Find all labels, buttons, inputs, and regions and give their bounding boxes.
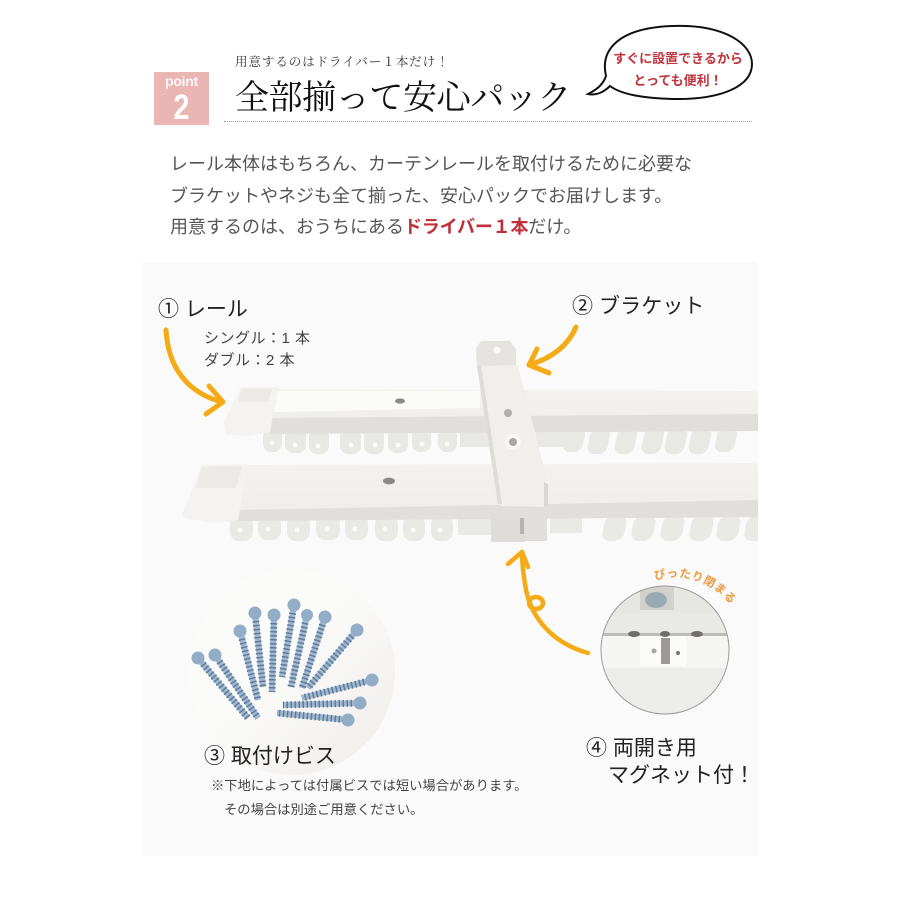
panel: product background xyxy=(142,262,758,856)
label: rail quantities xyxy=(204,330,311,368)
runner hooks xyxy=(263,431,737,454)
arrow: bracket xyxy=(529,327,576,373)
badge: point 2 xyxy=(154,72,209,125)
end cap xyxy=(182,464,248,523)
label: rail quantities: シングル：1 本 xyxy=(204,330,311,347)
badge: point 2: point xyxy=(165,73,198,89)
label: screws: ③ 取付けビス xyxy=(204,745,336,768)
end cap xyxy=(224,387,278,436)
badge: point 2: 2 xyxy=(174,88,189,127)
label: magnet xyxy=(586,737,755,787)
dotted divider xyxy=(224,121,752,122)
arrow: magnet xyxy=(508,552,588,653)
label: rail quantities: ダブル：2 本 xyxy=(204,352,295,368)
mounting hole xyxy=(395,398,405,404)
subheading: 用意するのはドライバー１本だけ！ xyxy=(235,55,450,69)
curved label: ぴったり閉まる: ぴったり閉まる xyxy=(654,568,736,602)
screw note: その場合は別途ご用意ください。 xyxy=(224,802,423,817)
rail body xyxy=(240,463,758,510)
rail body xyxy=(272,389,758,418)
title: 全部揃って安心パック xyxy=(235,80,571,117)
product illustration xyxy=(164,324,758,775)
bracket screws xyxy=(504,409,512,417)
magnet joint xyxy=(491,518,525,542)
intro text block xyxy=(170,154,692,237)
label: magnet: マグネット付！ xyxy=(608,764,755,787)
screw note: ※下地によっては付属ビスでは短い場合があります。 xyxy=(211,778,527,793)
screw note xyxy=(211,778,527,817)
label: magnet: ④ 両開き用 xyxy=(586,737,697,760)
top rail xyxy=(224,387,758,454)
screw photo circle xyxy=(189,569,395,775)
intro text block: ブラケットやネジも全て揃った、安心パックでお届けします。 xyxy=(170,186,672,206)
speech bubble callout: すぐに設置できるから xyxy=(613,51,743,66)
speech bubble callout: とっても便利！ xyxy=(633,73,723,88)
label: bracket: ② ブラケット xyxy=(572,295,705,318)
label: rail: ① レール xyxy=(158,298,248,321)
intro text block: レール本体はもちろん、カーテンレールを取付けるために必要な xyxy=(170,154,692,174)
arrow: rail xyxy=(166,330,223,414)
detail circle: magnet close-up xyxy=(600,585,730,715)
intro text block: 用意するのは、おうちにあるドライバー１本だけ。 xyxy=(170,217,581,237)
runner hooks xyxy=(230,515,770,541)
mounting hole xyxy=(383,478,395,484)
bracket xyxy=(476,341,548,507)
bottom rail xyxy=(182,463,770,542)
screws xyxy=(192,598,378,726)
